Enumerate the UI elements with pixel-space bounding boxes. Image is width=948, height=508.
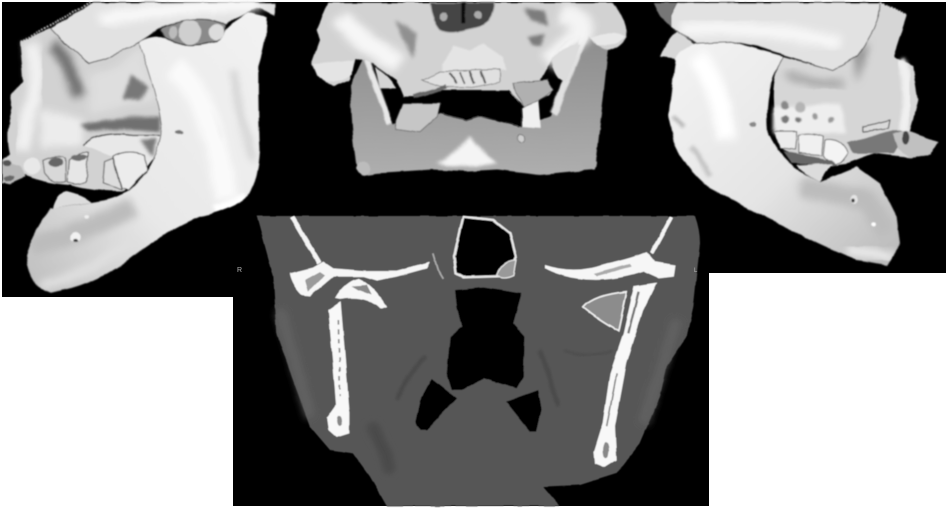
upper teeth, front view (395, 70, 553, 132)
maxilla, left view (2, 28, 162, 192)
deep tissue shading (280, 310, 677, 473)
left vallecula air (415, 378, 457, 430)
soft tissue (257, 216, 700, 506)
zygomatic band, left view (21, 3, 275, 63)
mandible, left view (26, 12, 267, 293)
sinus mucosal thickening (497, 260, 516, 277)
mandibular ramus, patient right (327, 302, 349, 437)
skull base, patient right (289, 217, 443, 296)
skull base, patient left (545, 217, 675, 280)
maxilla, right view (773, 3, 938, 167)
CT anatomy (257, 216, 700, 506)
nasal cavity (430, 3, 495, 32)
teeth, left view (2, 152, 147, 190)
zygomatic band, right view (653, 3, 907, 70)
molar window, left view (160, 19, 227, 45)
mandible, front view (350, 32, 608, 176)
sphenoid sinus air (454, 217, 516, 277)
panel: right lateral 3D render (653, 3, 938, 265)
coronoid fragment, patient left (583, 292, 627, 331)
teeth, right view (773, 132, 848, 165)
mandible, right view (668, 42, 900, 265)
upper skull, front view (312, 3, 627, 107)
condyle stump, right view (797, 163, 832, 182)
panel: frontal 3D render (312, 3, 627, 176)
left coronoid tip, front view (375, 67, 397, 88)
mandibular ramus, patient left (594, 283, 657, 467)
label: R: R (237, 267, 242, 274)
right coronoid tip, front view (552, 45, 580, 82)
condyle stump, left view (53, 192, 92, 208)
black mouth gap (440, 93, 522, 127)
fractured condyle, patient right (335, 278, 387, 309)
right vallecula air (506, 390, 542, 432)
nasopharyngeal airway (447, 287, 525, 390)
panel: left lateral 3D render (2, 3, 275, 293)
panel: coronal CT slice (233, 216, 709, 506)
label: L: L (694, 268, 698, 274)
